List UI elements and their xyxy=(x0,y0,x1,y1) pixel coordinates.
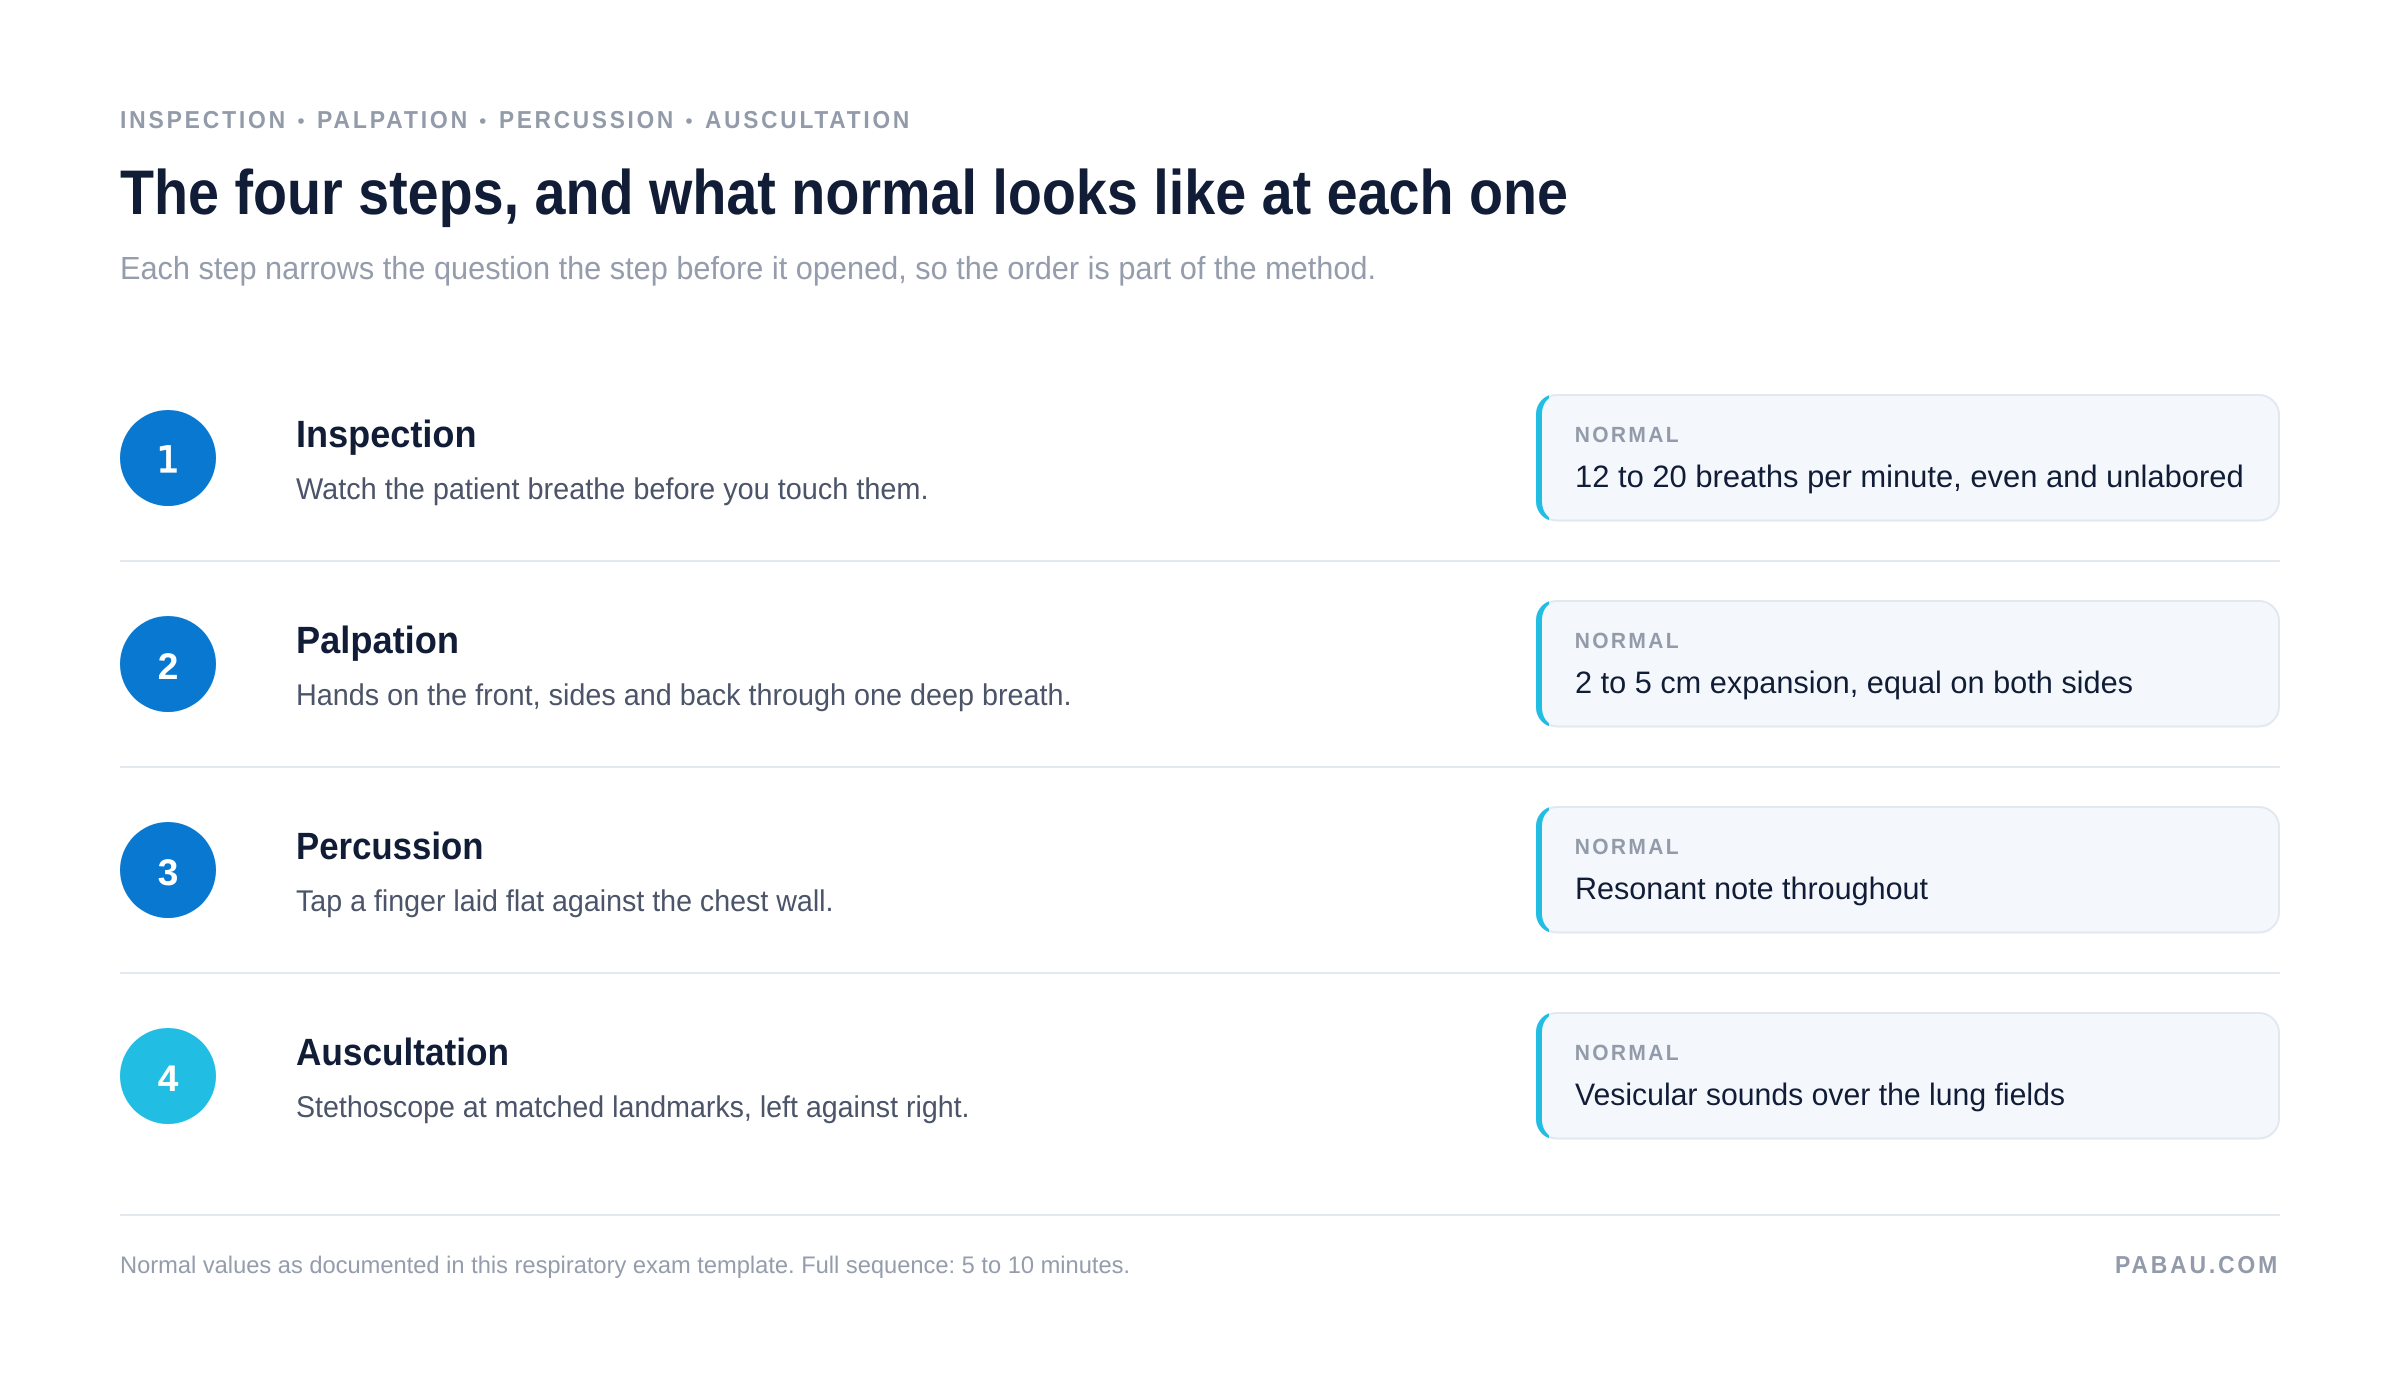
normal value card: NORMAL xyxy=(1575,628,1681,653)
normal value card xyxy=(1536,1013,2279,1138)
title: The four steps, and what normal looks like at each one xyxy=(120,158,1568,228)
normal value card: 12 to 20 breaths per minute, even and unlabored xyxy=(1575,459,2244,494)
row 2: Palpation xyxy=(120,601,2279,726)
step heading: Palpation: Palpation xyxy=(296,620,459,662)
normal value card: NORMAL xyxy=(1575,1040,1681,1065)
normal value card: Vesicular sounds over the lung fields xyxy=(1575,1077,2065,1112)
eyebrow: four step names: INSPECTION xyxy=(120,107,288,134)
footer note: Normal values as documented in this respiratory exam template. Full sequence: 5 to 10 minutes. xyxy=(120,1252,1130,1279)
normal value card xyxy=(1536,807,2279,932)
eyebrow: four step names xyxy=(120,107,912,134)
normal value card xyxy=(1536,601,2279,726)
eyebrow: four step names: PERCUSSION xyxy=(499,107,676,134)
step heading: Percussion: Percussion xyxy=(296,826,484,868)
step description: Hands on the front, sides and back through one deep breath. xyxy=(296,679,1072,712)
row 3: Percussion xyxy=(120,807,2279,932)
step number badge 3 xyxy=(120,822,216,918)
eyebrow: four step names: AUSCULTATION xyxy=(705,107,912,134)
subtitle: Each step narrows the question the step before it opened, so the order is part of the method. xyxy=(120,250,1376,286)
step number badge 4: 4 xyxy=(158,1058,179,1099)
eyebrow: four step names: PALPATION xyxy=(317,107,470,134)
step number badge 4 xyxy=(120,1028,216,1124)
step number badge 3: 3 xyxy=(158,852,178,893)
normal value card: NORMAL xyxy=(1575,422,1681,447)
step description: Tap a finger laid flat against the chest wall. xyxy=(296,885,834,918)
normal value card: Resonant note throughout xyxy=(1575,871,1928,906)
footer brand: PABAU.COM xyxy=(2115,1252,2280,1279)
step heading: Inspection: Inspection xyxy=(296,414,476,456)
step number badge 1 xyxy=(120,410,216,506)
step number badge 1: 1 xyxy=(157,440,179,481)
normal value card: 2 to 5 cm expansion, equal on both sides xyxy=(1575,665,2133,700)
row 1: Inspection xyxy=(120,395,2279,520)
step number badge 2: 2 xyxy=(158,646,178,687)
row 4: Auscultation xyxy=(120,1013,2279,1138)
step heading: Auscultation: Auscultation xyxy=(296,1032,509,1074)
normal value card xyxy=(1536,395,2279,520)
step number badge 2 xyxy=(120,616,216,712)
step description: Stethoscope at matched landmarks, left against right. xyxy=(296,1091,970,1124)
step description: Watch the patient breathe before you touch them. xyxy=(296,473,928,506)
normal value card: NORMAL xyxy=(1575,834,1681,859)
